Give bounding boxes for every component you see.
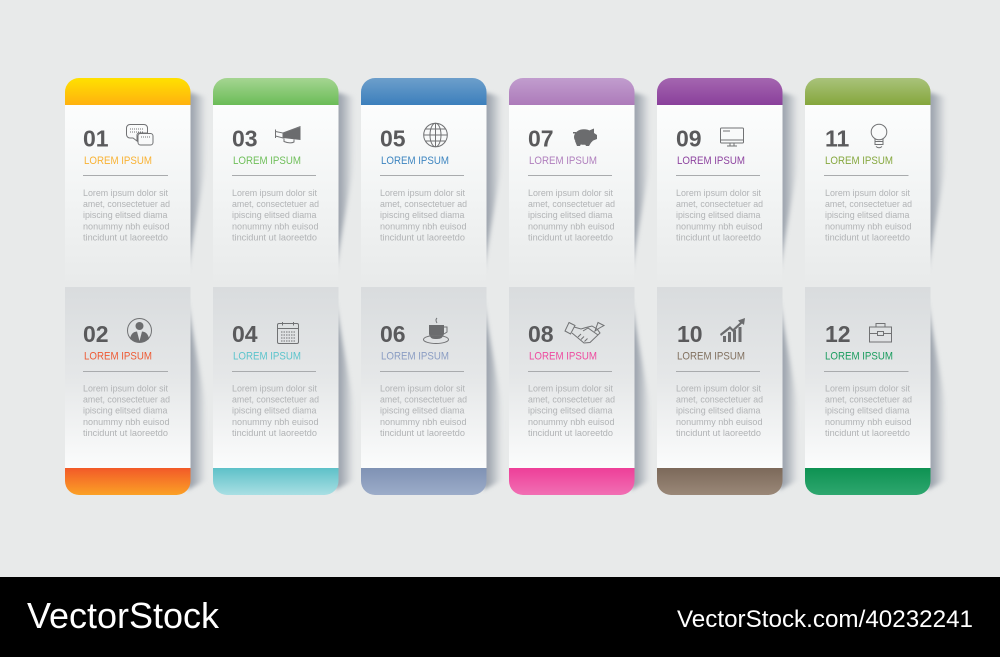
body text: Lorem ipsum dolor sit [825, 187, 910, 198]
footer bar [0, 577, 1000, 657]
label: LOREM IPSUM [84, 350, 152, 362]
icon: piggy bank [573, 128, 597, 146]
icon: megaphone [276, 126, 300, 143]
body text: amet, consectetuer ad [380, 394, 467, 405]
body text: ipiscing elitsed diama [676, 209, 761, 220]
step 06 card [361, 287, 503, 495]
body text: nonummy nbh euisod [232, 220, 318, 231]
body text: ipiscing elitsed diama [528, 405, 613, 416]
body text: nonummy nbh euisod [676, 220, 762, 231]
icon: handshake [565, 322, 604, 343]
number 06: 06 [380, 321, 406, 347]
number 05: 05 [380, 126, 406, 152]
body text: nonummy nbh euisod [83, 220, 170, 231]
body text: amet, consectetuer ad [528, 198, 615, 209]
body text [83, 382, 170, 438]
body text: tincidunt ut laoreetdo [676, 231, 761, 242]
body text: tincidunt ut laoreetdo [528, 231, 613, 242]
body text: nonummy nbh euisod [676, 416, 762, 427]
body text [528, 382, 615, 438]
body text: Lorem ipsum dolor sit [676, 382, 761, 394]
icon: calendar [278, 322, 298, 344]
step 08 card [509, 287, 651, 495]
body text: nonummy nbh euisod [83, 416, 170, 427]
icon: growth chart [720, 318, 745, 342]
body text: nonummy nbh euisod [380, 416, 466, 427]
number 04: 04 [232, 321, 258, 347]
body text [676, 382, 763, 438]
icon: light bulb [871, 124, 887, 148]
body text: tincidunt ut laoreetdo [825, 231, 910, 242]
body text [380, 187, 467, 242]
body text: Lorem ipsum dolor sit [676, 187, 761, 198]
body text [676, 187, 763, 242]
body text: nonummy nbh euisod [825, 416, 912, 427]
body text: nonummy nbh euisod [825, 220, 912, 231]
body text: tincidunt ut laoreetdo [83, 231, 168, 242]
body text: amet, consectetuer ad [83, 198, 170, 209]
label: LOREM IPSUM [529, 155, 597, 167]
body text [380, 382, 467, 438]
body text: ipiscing elitsed diama [380, 209, 465, 220]
label: LOREM IPSUM [381, 155, 449, 167]
number 03: 03 [232, 126, 258, 152]
icon: briefcase [870, 324, 892, 342]
body text: nonummy nbh euisod [528, 220, 614, 231]
step 02 card [65, 287, 207, 495]
body text: Lorem ipsum dolor sit [825, 382, 910, 394]
body text: tincidunt ut laoreetdo [380, 427, 465, 438]
step 01 card [65, 78, 207, 287]
body text: Lorem ipsum dolor sit [528, 187, 613, 198]
body text: nonummy nbh euisod [528, 416, 614, 427]
body text [232, 187, 319, 242]
body text: nonummy nbh euisod [380, 220, 466, 231]
icon: monitor [720, 128, 744, 146]
number 07: 07 [528, 126, 554, 152]
step 11 card [805, 78, 947, 287]
label: LOREM IPSUM [825, 350, 893, 362]
body text: Lorem ipsum dolor sit [232, 382, 317, 394]
body text: tincidunt ut laoreetdo [676, 427, 761, 438]
step 12 card [805, 287, 947, 495]
body text [825, 187, 912, 242]
label: LOREM IPSUM [677, 155, 745, 167]
label: LOREM IPSUM [233, 350, 301, 362]
icon: business person [128, 318, 152, 342]
body text: tincidunt ut laoreetdo [83, 427, 168, 438]
body text: tincidunt ut laoreetdo [232, 231, 317, 242]
icon: coffee cup [424, 318, 448, 344]
icon: globe [424, 123, 447, 147]
body text [528, 187, 615, 242]
brand name: VectorStock [27, 595, 220, 636]
number 08: 08 [528, 321, 554, 347]
body text: ipiscing elitsed diama [83, 405, 168, 416]
body text: ipiscing elitsed diama [676, 405, 761, 416]
label: LOREM IPSUM [677, 350, 745, 362]
label: LOREM IPSUM [233, 155, 301, 167]
step 10 card [657, 287, 799, 495]
body text [232, 382, 319, 438]
body text: Lorem ipsum dolor sit [528, 382, 613, 394]
step 05 card [361, 78, 503, 287]
stock url: VectorStock.com/40232241 [677, 606, 973, 633]
body text [825, 382, 912, 438]
number 09: 09 [676, 126, 702, 152]
body text: tincidunt ut laoreetdo [232, 427, 317, 438]
body text: ipiscing elitsed diama [232, 209, 317, 220]
body text: amet, consectetuer ad [825, 394, 912, 405]
number 01: 01 [83, 126, 109, 152]
body text: ipiscing elitsed diama [83, 209, 168, 220]
body text: amet, consectetuer ad [676, 198, 763, 209]
body text: amet, consectetuer ad [825, 198, 912, 209]
body text: amet, consectetuer ad [676, 394, 763, 405]
body text: ipiscing elitsed diama [380, 405, 465, 416]
label: LOREM IPSUM [381, 350, 449, 362]
body text: Lorem ipsum dolor sit [380, 187, 465, 198]
number 02: 02 [83, 321, 109, 347]
step 03 card [213, 78, 355, 287]
body text: amet, consectetuer ad [380, 198, 467, 209]
icon: chat bubbles [126, 124, 153, 145]
body text: amet, consectetuer ad [232, 394, 319, 405]
number 12: 12 [825, 321, 851, 347]
body text: tincidunt ut laoreetdo [825, 427, 910, 438]
label: LOREM IPSUM [529, 350, 597, 362]
label: LOREM IPSUM [825, 155, 893, 167]
step 04 card [213, 287, 355, 495]
body text: amet, consectetuer ad [528, 394, 615, 405]
body text: ipiscing elitsed diama [825, 405, 910, 416]
body text: Lorem ipsum dolor sit [380, 382, 465, 394]
number 10: 10 [677, 321, 703, 347]
body text: Lorem ipsum dolor sit [83, 187, 168, 198]
body text: nonummy nbh euisod [232, 416, 318, 427]
body text: Lorem ipsum dolor sit [232, 187, 317, 198]
body text: tincidunt ut laoreetdo [380, 231, 465, 242]
body text: ipiscing elitsed diama [825, 209, 910, 220]
step 07 card [509, 78, 651, 287]
body text: amet, consectetuer ad [232, 198, 319, 209]
body text: ipiscing elitsed diama [528, 209, 613, 220]
step 09 card [657, 78, 799, 287]
body text [83, 187, 170, 242]
body text: tincidunt ut laoreetdo [528, 427, 613, 438]
number 11: 11 [825, 126, 850, 152]
body text: Lorem ipsum dolor sit [83, 382, 168, 394]
label: LOREM IPSUM [84, 155, 152, 167]
body text: ipiscing elitsed diama [232, 405, 317, 416]
body text: amet, consectetuer ad [83, 394, 170, 405]
